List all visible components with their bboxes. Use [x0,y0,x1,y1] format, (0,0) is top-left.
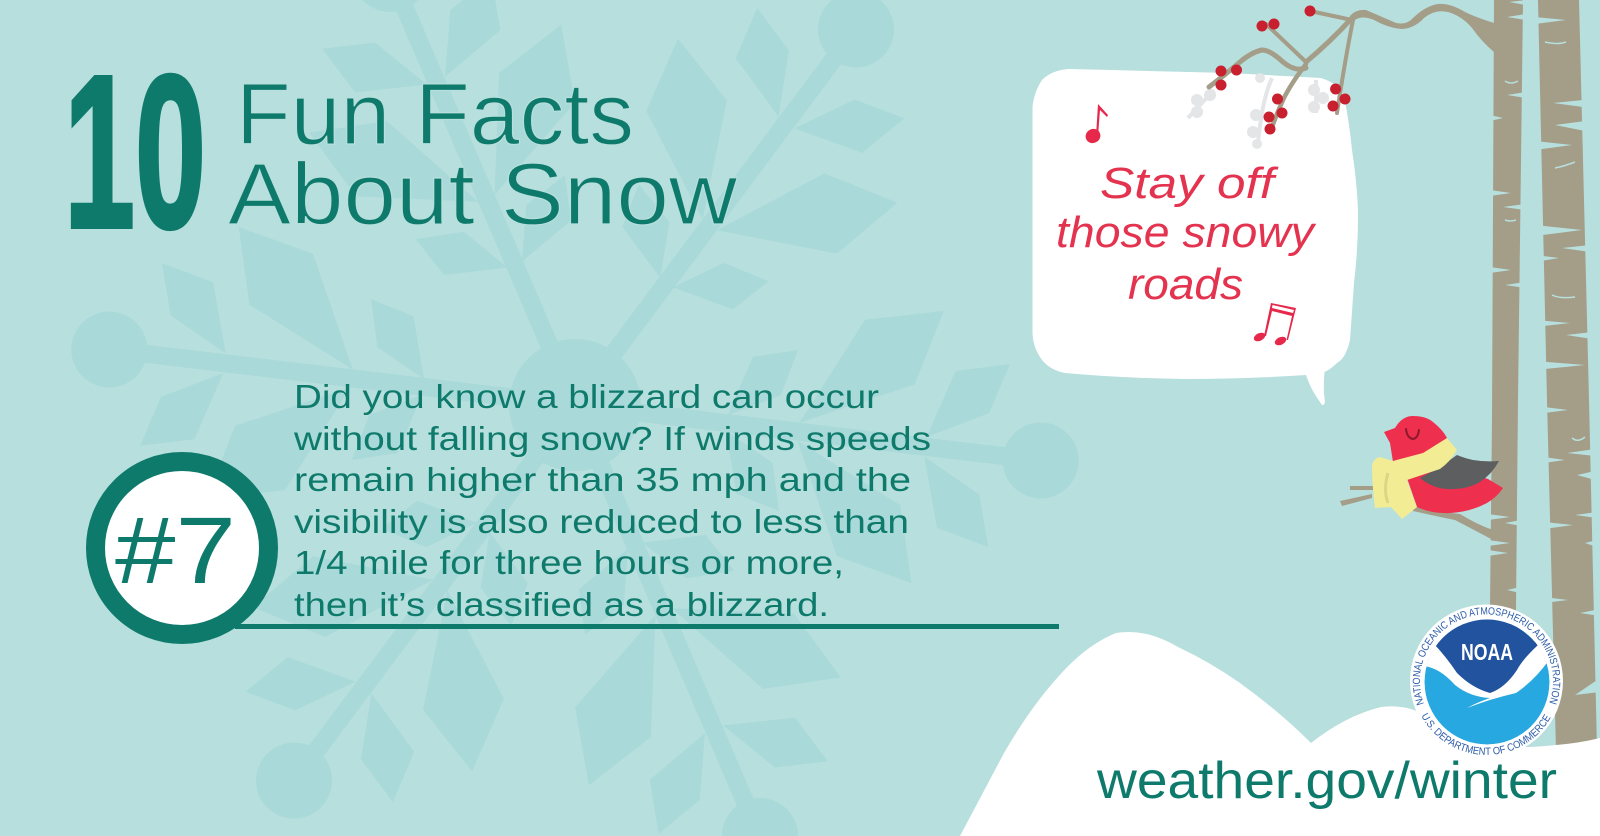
dark blue cap [1435,618,1538,693]
speech bubble [1032,69,1358,405]
logo ring text: NATIONAL OCEANIC AND ATMOSPHERIC ADMINISTRATION [1412,607,1560,706]
fact text: without falling snow? If winds speeds [293,421,931,458]
fact text: visibility is also reduced to less than [294,504,909,541]
NOAA logo [1410,604,1563,755]
fact text: 1/4 mile for three hours or more, [294,545,844,582]
logo ring text [1412,607,1560,755]
bird on branch [1340,416,1503,540]
icon: single music note [1083,104,1108,146]
tree trunks [1488,0,1600,750]
icon: double music note [1252,303,1296,347]
bubble message [1056,159,1317,309]
white bird swoop [1426,640,1546,708]
title [64,31,738,274]
bubble message: Stay off [1100,159,1280,208]
ghost twigs behind branch [1188,73,1329,149]
title line 2: About Snow [228,146,738,243]
fact underline [235,624,1059,629]
bird scarf [1372,438,1457,519]
fact text: then it’s classified as a blizzard. [294,587,829,624]
upper tree branch [1209,4,1494,130]
fact text: remain higher than 35 mph and the [294,462,911,499]
bird eye [1406,429,1419,439]
title number 10: 10 [64,31,206,274]
background snowflake [55,0,1095,836]
bubble message: roads [1128,260,1243,309]
fact number badge [96,462,268,634]
bird head [1384,416,1447,462]
fact text: Did you know a blizzard can occur [294,379,879,416]
bird body [1407,465,1503,513]
bubble message: those snowy [1056,208,1317,257]
bird wing [1420,455,1499,489]
website address: weather.gov/winter [1096,752,1557,810]
title line 1: Fun Facts [236,66,634,163]
NOAA wordmark: NOAA [1461,639,1513,665]
snow hills [960,632,1600,836]
fact text [293,379,931,624]
fact number badge: #7 [115,498,236,604]
logo ring text: U.S. DEPARTMENT OF COMMERCE [1422,712,1551,755]
red berries [1216,6,1350,134]
bird perch [1340,486,1493,540]
